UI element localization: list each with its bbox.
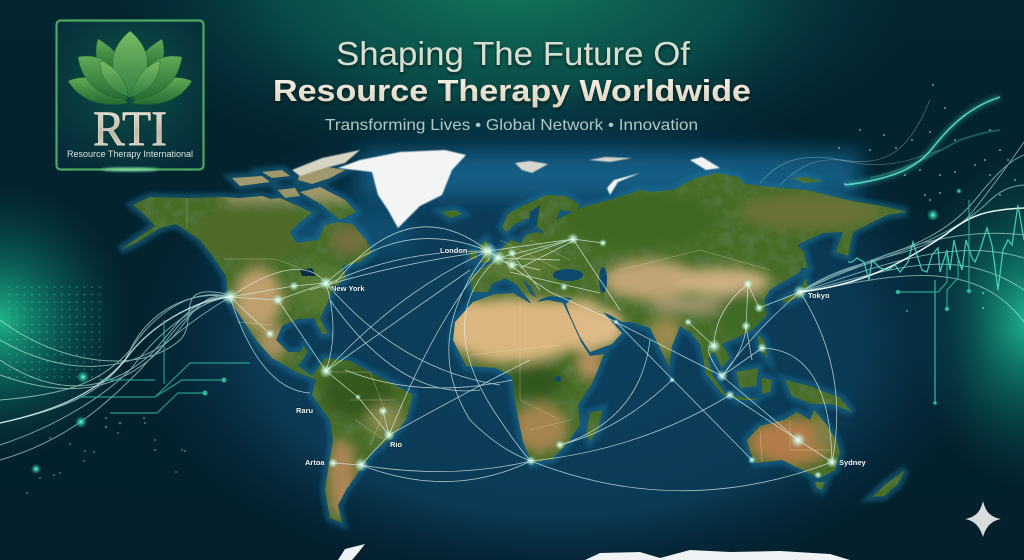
flowing lines (0, 292, 230, 460)
Europe (480, 244, 560, 280)
Patagonia (328, 438, 356, 518)
Siberia (565, 192, 715, 248)
flowing lines from Tokyo (800, 142, 1024, 322)
route network (230, 227, 837, 491)
title (273, 35, 751, 108)
circuit traces (80, 320, 250, 413)
arctic tundra (225, 160, 360, 202)
Greenland and arctic ice (292, 150, 720, 228)
subtitle: Transforming Lives • Global Network • Innovation (325, 117, 698, 134)
logo caption: Resource Therapy International (67, 149, 193, 159)
logo panel (56, 20, 204, 172)
Western USA (234, 268, 282, 328)
network nodes (222, 233, 838, 479)
icon: lotus (68, 31, 192, 104)
inland seas (300, 205, 607, 382)
Arabia (576, 308, 624, 348)
glowing particles (927, 209, 939, 221)
India (647, 317, 683, 353)
city labels (296, 246, 867, 467)
Southern Africa (512, 404, 568, 452)
city labels: Artoa (305, 458, 325, 467)
title line two: Resource Therapy Worldwide (273, 73, 751, 108)
Central Asia (602, 260, 698, 300)
left decoration: flowing lines and circuit (0, 286, 250, 494)
Amazon (322, 366, 394, 418)
SE Asia (717, 291, 773, 339)
title line one: Shaping The Future Of (336, 35, 691, 72)
continental shelf (120, 166, 907, 523)
city labels: Sydney (839, 458, 867, 467)
antarctica (338, 544, 850, 560)
logo glow (102, 168, 158, 172)
circuit traces (898, 200, 969, 403)
glowing particles (75, 416, 87, 428)
ECG line (848, 205, 1024, 290)
city labels: Tokyo (808, 291, 830, 300)
Canada green (190, 209, 310, 261)
city labels: New York (331, 284, 365, 293)
city labels: London (440, 246, 468, 255)
icon: sparkle (965, 501, 1001, 537)
country borders (187, 198, 830, 462)
aurora swoosh (760, 97, 1000, 185)
right decoration: waves, ECG line and circuit (760, 84, 1024, 405)
logo wordmark: RTI (93, 100, 167, 156)
land masses (120, 167, 906, 523)
city labels: Raru (296, 406, 314, 415)
Sahara (445, 298, 585, 362)
Congo (507, 366, 563, 398)
dot grid (8, 286, 103, 378)
world map (100, 140, 930, 560)
city labels: Rio (390, 440, 402, 449)
Australia (748, 419, 836, 465)
